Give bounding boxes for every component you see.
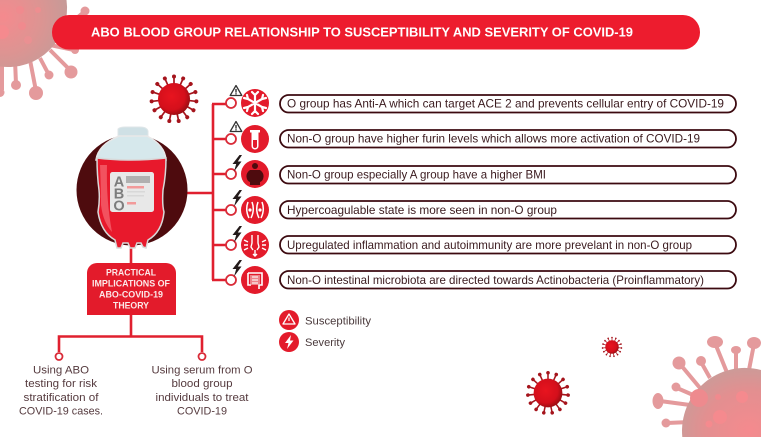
row 6 pill: Non-O intestinal microbiota are directed towards Actinobacteria (Proinflammatory): [287, 274, 704, 287]
implication: serum treatment: Using serum from O: [152, 364, 253, 376]
implication: risk stratification: testing for risk: [25, 378, 97, 390]
icon: antibody: [241, 89, 269, 117]
row 5 pill: [280, 236, 736, 254]
icon: intestine: [241, 266, 269, 294]
virus: small decorative: [602, 337, 622, 357]
virus: lower decorative: [526, 371, 570, 415]
virus: upper decorative: [149, 74, 199, 123]
label card: A: [114, 174, 125, 190]
label card: [110, 172, 154, 214]
implication: risk stratification: Using ABO: [33, 364, 89, 376]
implication: serum treatment: [152, 353, 253, 418]
row 5 pill: Upregulated inflammation and autoimmunity are more prevelant in non-O group: [287, 239, 692, 252]
virus: bottom-right pale corner: [652, 336, 761, 437]
box: practical implications: IMPLICATIONS OF: [92, 278, 170, 290]
row 4 pill: [280, 201, 736, 218]
virus: top-left pale corner: [0, 0, 90, 100]
box: practical implications: THEORY: [113, 300, 150, 312]
legend: severity: Severity: [305, 337, 345, 349]
rows: pills with text: [280, 95, 736, 288]
implication: serum treatment: COVID-19: [177, 406, 227, 418]
row 4 pill: Hypercoagulable state is more seen in non-O group: [287, 204, 557, 217]
legend: susceptibility: Susceptibility: [305, 316, 372, 328]
icon: test tube: [241, 125, 269, 153]
implication: risk stratification: [19, 353, 103, 418]
implication: serum treatment: blood group: [172, 378, 232, 390]
icon: body figure: [241, 160, 269, 188]
box: practical implications: ABO-COVID-19: [99, 290, 163, 300]
blood bag with ABO label: [76, 127, 188, 248]
implication: risk stratification: stratification of: [24, 392, 99, 404]
implication: serum treatment: individuals to treat: [156, 392, 249, 404]
susceptibility and severity markers: [230, 86, 242, 276]
label card: B: [114, 186, 124, 202]
box: practical implications: [87, 263, 176, 315]
row 6 pill: [280, 271, 736, 288]
row 3 pill: [280, 166, 736, 184]
row 2 pill: Non-O group have higher furin levels which allows more activation of COVID-19: [287, 132, 700, 146]
icon: blood vessels: [241, 196, 269, 224]
box: practical implications: PRACTICAL: [106, 268, 156, 278]
implication: risk stratification: COVID-19 cases.: [19, 406, 103, 418]
row 1 pill: O group has Anti-A which can target ACE 2 and prevents cellular entry of COVID-19: [287, 98, 724, 110]
title text: ABO BLOOD GROUP RELATIONSHIP TO SUSCEPTIBILITY AND SEVERITY OF COVID-19: [91, 24, 633, 40]
icon: inflammation: [241, 231, 269, 259]
row 3 pill: Non-O group especially A group have a higher BMI: [287, 168, 546, 182]
row nodes: [226, 98, 236, 285]
legend: [279, 310, 372, 352]
label card: O: [113, 198, 125, 214]
connector lines: [59, 104, 226, 352]
title banner: [52, 15, 700, 50]
row 2 pill: [280, 130, 736, 148]
